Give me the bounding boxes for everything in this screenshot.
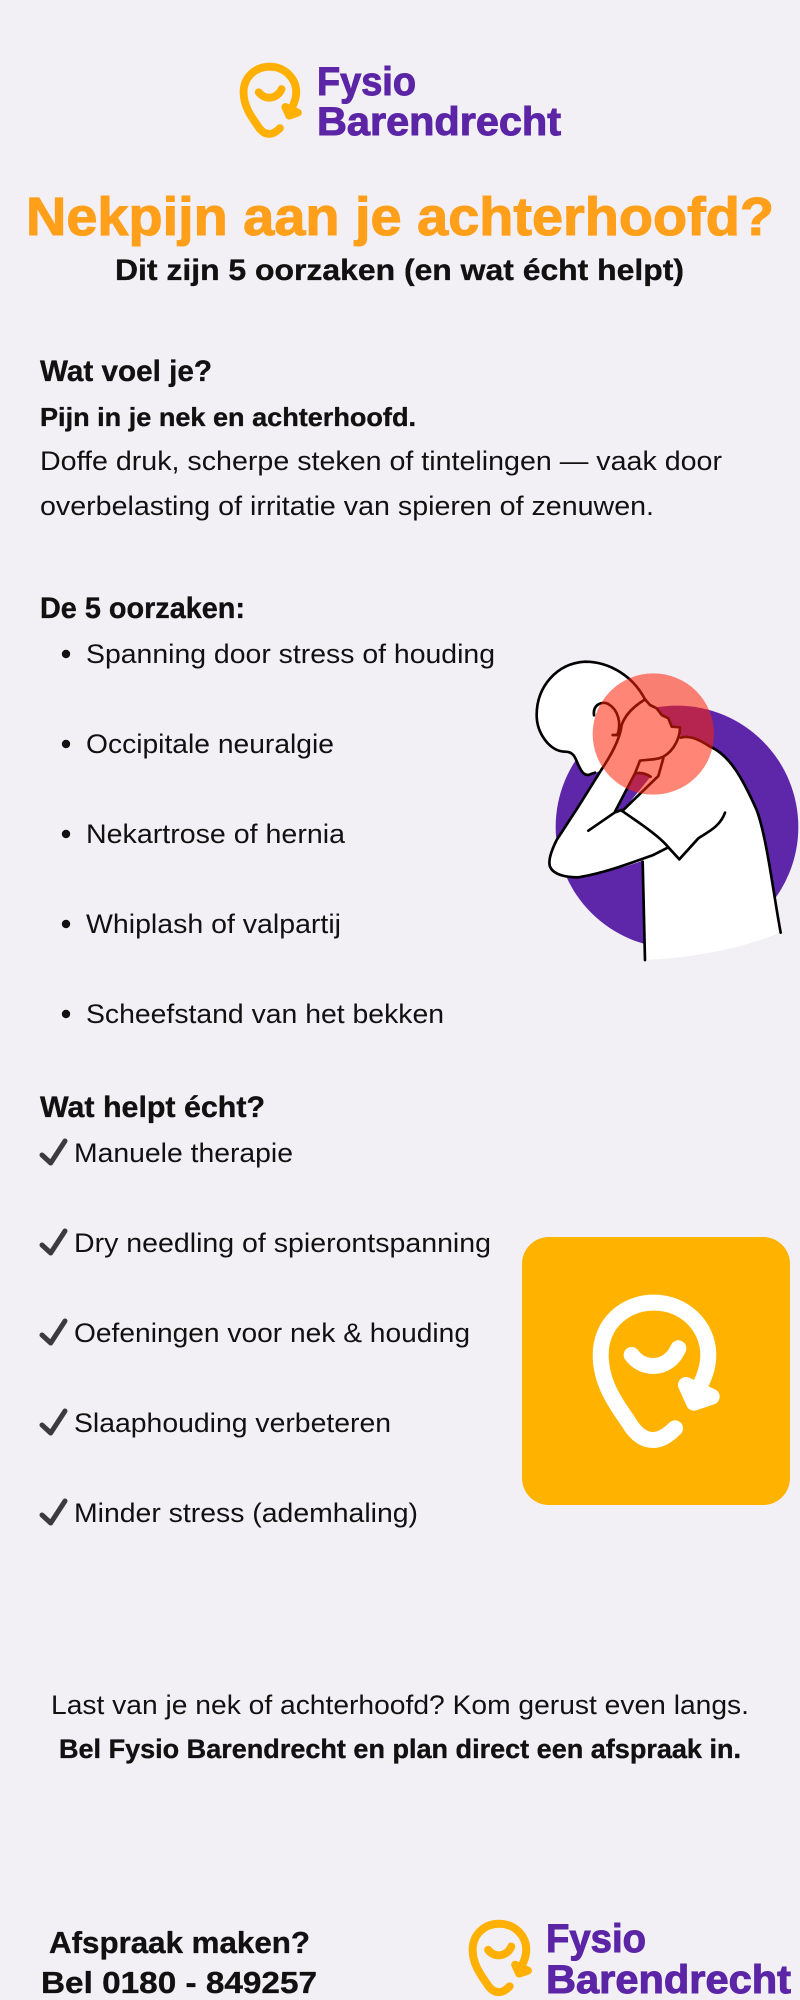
icon: white ear logo bbox=[601, 1303, 712, 1440]
purple circle bbox=[556, 706, 798, 948]
bullet list of causes bbox=[62, 639, 495, 1029]
description: Doffe druk, scherpe steken of tintelingen — vaak door bbox=[40, 446, 722, 476]
logo wordmark: Fysio bbox=[546, 1917, 646, 1961]
heading: de 5 oorzaken: De 5 oorzaken: bbox=[40, 592, 245, 625]
icon: ear logo bbox=[244, 67, 298, 134]
bullet list of causes: Nekartrose of hernia bbox=[86, 819, 346, 849]
app icon tile bbox=[522, 1237, 790, 1505]
checklist of treatments: Manuele therapie bbox=[74, 1138, 293, 1168]
checklist of treatments bbox=[42, 1138, 491, 1528]
gap between arm and neck bbox=[616, 773, 651, 811]
section: de 5 oorzaken bbox=[40, 592, 495, 1029]
logo wordmark bbox=[317, 60, 561, 144]
checklist of treatments: Oefeningen voor nek & houding bbox=[74, 1318, 470, 1348]
logo wordmark bbox=[546, 1917, 791, 2000]
illustration: person holding neck bbox=[537, 662, 798, 960]
invitation line: Last van je nek of achterhoofd? Kom gerust even langs. bbox=[51, 1690, 749, 1720]
title: Nekpijn aan je achterhoofd? bbox=[26, 187, 774, 247]
orange rounded square bbox=[522, 1237, 790, 1505]
icon: ear logo bbox=[473, 1924, 528, 1992]
figure silhouette bbox=[537, 662, 781, 960]
subtitle: Dit zijn 5 oorzaken (en wat écht helpt) bbox=[115, 254, 684, 287]
checklist of treatments: Slaaphouding verbeteren bbox=[74, 1408, 391, 1438]
heading: wat helpt echt: Wat helpt écht? bbox=[40, 1091, 265, 1124]
call to action bbox=[51, 1690, 749, 1764]
header logo bbox=[244, 60, 561, 144]
footer contact: Afspraak maken? bbox=[49, 1925, 310, 1960]
footer contact bbox=[41, 1925, 317, 2000]
heading: wat voel je: Wat voel je? bbox=[40, 355, 212, 388]
bullet list of causes: Whiplash of valpartij bbox=[86, 909, 341, 939]
footer contact: Bel 0180 - 849257 bbox=[41, 1965, 317, 2000]
section: wat voel je bbox=[40, 355, 722, 521]
bold call line: Bel Fysio Barendrecht en plan direct een afspraak in. bbox=[59, 1734, 741, 1764]
section: wat helpt echt bbox=[40, 1091, 491, 1528]
red pain circle bbox=[593, 673, 714, 795]
figure outline bbox=[537, 662, 781, 960]
description: overbelasting of irritatie van spieren of zenuwen. bbox=[40, 491, 654, 521]
description bbox=[40, 446, 722, 521]
logo wordmark: Fysio bbox=[317, 60, 416, 104]
logo wordmark: Barendrecht bbox=[317, 100, 561, 144]
bullet list of causes: Spanning door stress of houding bbox=[86, 639, 495, 669]
bullet list of causes: Occipitale neuralgie bbox=[86, 729, 334, 759]
bullet list of causes: Scheefstand van het bekken bbox=[86, 999, 444, 1029]
footer logo bbox=[473, 1917, 791, 2000]
checklist of treatments: Minder stress (ademhaling) bbox=[74, 1498, 418, 1528]
checklist of treatments: Dry needling of spierontspanning bbox=[74, 1228, 491, 1258]
bold statement: Pijn in je nek en achterhoofd. bbox=[40, 402, 416, 432]
